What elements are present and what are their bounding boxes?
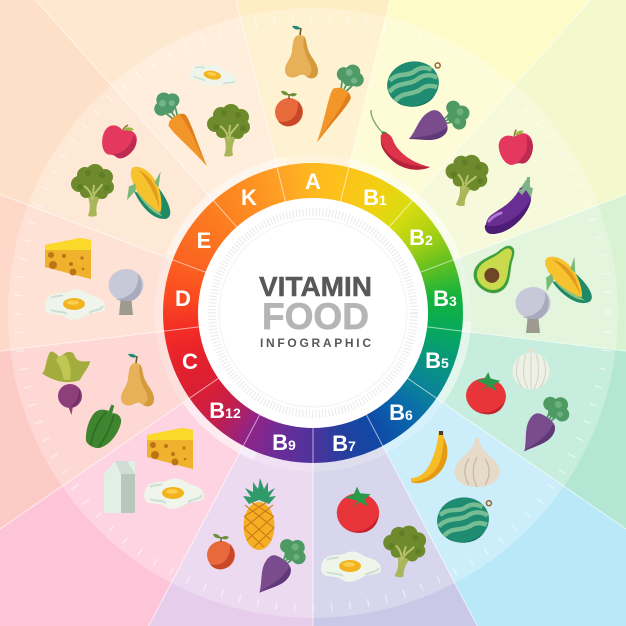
vitamin labels on ring: D [175, 286, 191, 311]
icon: broccoli, vitamin B2 [439, 150, 492, 210]
icon: egg, vitamin K [188, 61, 239, 91]
title: INFOGRAPHIC [260, 336, 371, 350]
icon: radish with leaves, vitamin C [42, 352, 90, 415]
icon: carrot, vitamin A [304, 59, 369, 149]
title [259, 271, 372, 350]
icon: apple, vitamin E [97, 118, 141, 162]
vitamin labels on ring: B9 [272, 430, 296, 455]
icon: cheese, vitamin B12 [147, 428, 193, 469]
vitamin labels on ring: B3 [433, 286, 457, 311]
vitamin labels on ring [175, 169, 457, 456]
icon: chili pepper, vitamin B1 [371, 110, 430, 170]
vitamin labels on ring: K [241, 185, 257, 210]
icon: tomato, vitamin B7 [337, 487, 379, 533]
icon: carrot, vitamin K [148, 86, 219, 174]
icon: pear, vitamin C [121, 354, 154, 406]
icon: beetroot, vitamin B9 [248, 531, 313, 603]
vitamin labels on ring: B2 [409, 225, 433, 250]
icon: watermelon, vitamin B1 [383, 56, 448, 112]
icon: beetroot, vitamin B5 [513, 389, 576, 461]
icon: orange, vitamin A [275, 91, 303, 126]
icon: apple, vitamin B2 [497, 128, 535, 167]
title: VITAMIN [259, 271, 372, 302]
icon: mushroom, vitamin D [108, 269, 144, 315]
icon: garlic, vitamin B6 [454, 438, 500, 487]
icon: corn, vitamin E [117, 158, 178, 230]
icon: broccoli, vitamin B7 [378, 522, 429, 581]
icon: beetroot, vitamin B1 [402, 95, 475, 154]
icon: milk carton, vitamin B12 [104, 461, 135, 513]
icon: banana, vitamin B6 [411, 431, 447, 483]
icon: corn, vitamin B3 [532, 245, 599, 318]
icon: pineapple, vitamin B9 [243, 478, 276, 550]
vitamin labels on ring: B1 [363, 185, 387, 210]
icon: cheese, vitamin D [45, 238, 91, 279]
icon: mushroom, vitamin B3 [516, 287, 550, 333]
icon: avocado, vitamin B3 [467, 236, 527, 300]
vitamin labels on ring: A [305, 169, 321, 194]
title: FOOD [262, 296, 369, 337]
rainbow vitamin ring [163, 163, 463, 463]
vitamin labels on ring: B12 [209, 398, 241, 423]
icon: eggplant, vitamin B2 [485, 177, 533, 234]
vitamin labels on ring: E [197, 228, 211, 253]
vitamin labels on ring: C [182, 349, 198, 374]
icon: egg, vitamin B12 [144, 479, 204, 509]
icon: onion, vitamin B5 [512, 348, 550, 390]
icon: orange, vitamin B9 [207, 534, 235, 569]
vitamin labels on ring: B7 [332, 431, 356, 456]
vitamin labels on ring: B5 [425, 348, 449, 373]
icon: egg, vitamin D [45, 290, 105, 320]
vitamin labels on ring: B6 [389, 400, 413, 425]
icon: egg, vitamin B7 [321, 552, 381, 582]
icon: green pepper, vitamin C [81, 399, 126, 453]
centre white disc [198, 198, 428, 428]
icon: broccoli, vitamin K [207, 104, 250, 157]
icon: broccoli, vitamin E [71, 164, 114, 217]
icon: watermelon, vitamin B6 [434, 493, 496, 546]
icon: pear, vitamin A [285, 26, 318, 78]
ring segment dividers [164, 167, 462, 463]
icon: tomato, vitamin B5 [464, 369, 509, 417]
